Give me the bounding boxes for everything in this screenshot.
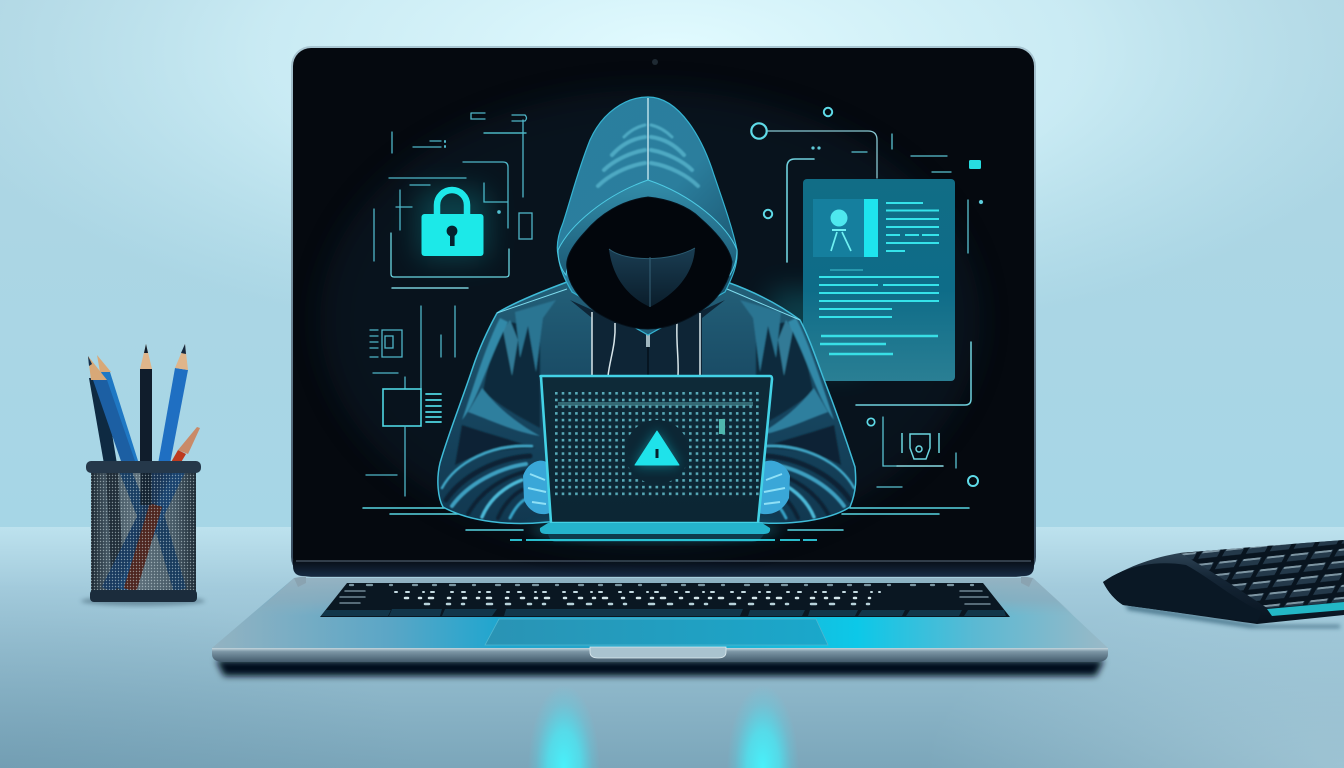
hoodie center torso <box>570 300 725 380</box>
pencil cup <box>81 344 205 606</box>
pencils above rim <box>88 344 200 464</box>
cup rim <box>86 461 201 473</box>
key grid <box>1180 540 1344 608</box>
trackpad <box>485 619 828 645</box>
document text lines <box>819 203 939 354</box>
small cyan block icon <box>969 160 981 169</box>
small laptop screen <box>540 376 772 523</box>
face mask <box>609 248 695 307</box>
icon: small mug glyph <box>902 433 939 459</box>
drawstrings and zipper <box>592 312 700 376</box>
desk reflection: cyan light streaks <box>528 685 799 768</box>
sleeve and shoulder folds <box>442 300 854 518</box>
right circuit line art <box>751 108 982 530</box>
front edge <box>212 648 1108 662</box>
keyboard shadow <box>1125 604 1340 628</box>
base deck <box>212 578 1108 650</box>
cyan light strip <box>1267 602 1344 616</box>
hood rim band <box>558 180 737 275</box>
hood fold highlights <box>598 125 698 186</box>
keyboard body <box>1103 540 1344 624</box>
small laptop in front of hacker <box>530 376 780 542</box>
wireless keyboard <box>1103 535 1344 628</box>
screen dot matrix <box>555 392 759 499</box>
laptop shadow on desk <box>216 660 1104 676</box>
keyboard <box>320 583 1010 617</box>
hinge tabs <box>294 576 1033 587</box>
cup shadow <box>81 596 205 606</box>
glowing line under figure <box>510 539 817 541</box>
pencil: blue rear left <box>101 372 139 464</box>
keyboard front curve <box>1103 563 1262 622</box>
laptop <box>291 46 1036 577</box>
thumb notch <box>590 647 726 658</box>
desk surface <box>0 527 1344 768</box>
icon: padlock <box>418 190 488 260</box>
laptop lid and bezel <box>291 46 1036 577</box>
cup base <box>90 590 197 602</box>
torso fill between drawstrings <box>592 318 702 380</box>
dark face opening <box>567 197 732 329</box>
pencil: black center <box>140 369 152 464</box>
pencil: dark blue left <box>89 378 117 464</box>
hoodie body <box>438 282 856 523</box>
background wall <box>0 0 1344 530</box>
laptop base <box>212 576 1108 662</box>
panel: document card <box>770 179 955 381</box>
cup mesh body <box>91 470 196 592</box>
document photo with person icon <box>813 199 878 257</box>
small laptop base <box>540 523 770 534</box>
pencil: blue front left <box>93 380 136 464</box>
pencil: orange <box>170 450 186 464</box>
left circuit line art <box>363 113 532 530</box>
hacker figure <box>438 97 856 523</box>
pencil: blue right <box>158 368 188 464</box>
hands <box>523 461 790 514</box>
warning triangle icon <box>625 420 689 484</box>
hood <box>557 97 737 335</box>
